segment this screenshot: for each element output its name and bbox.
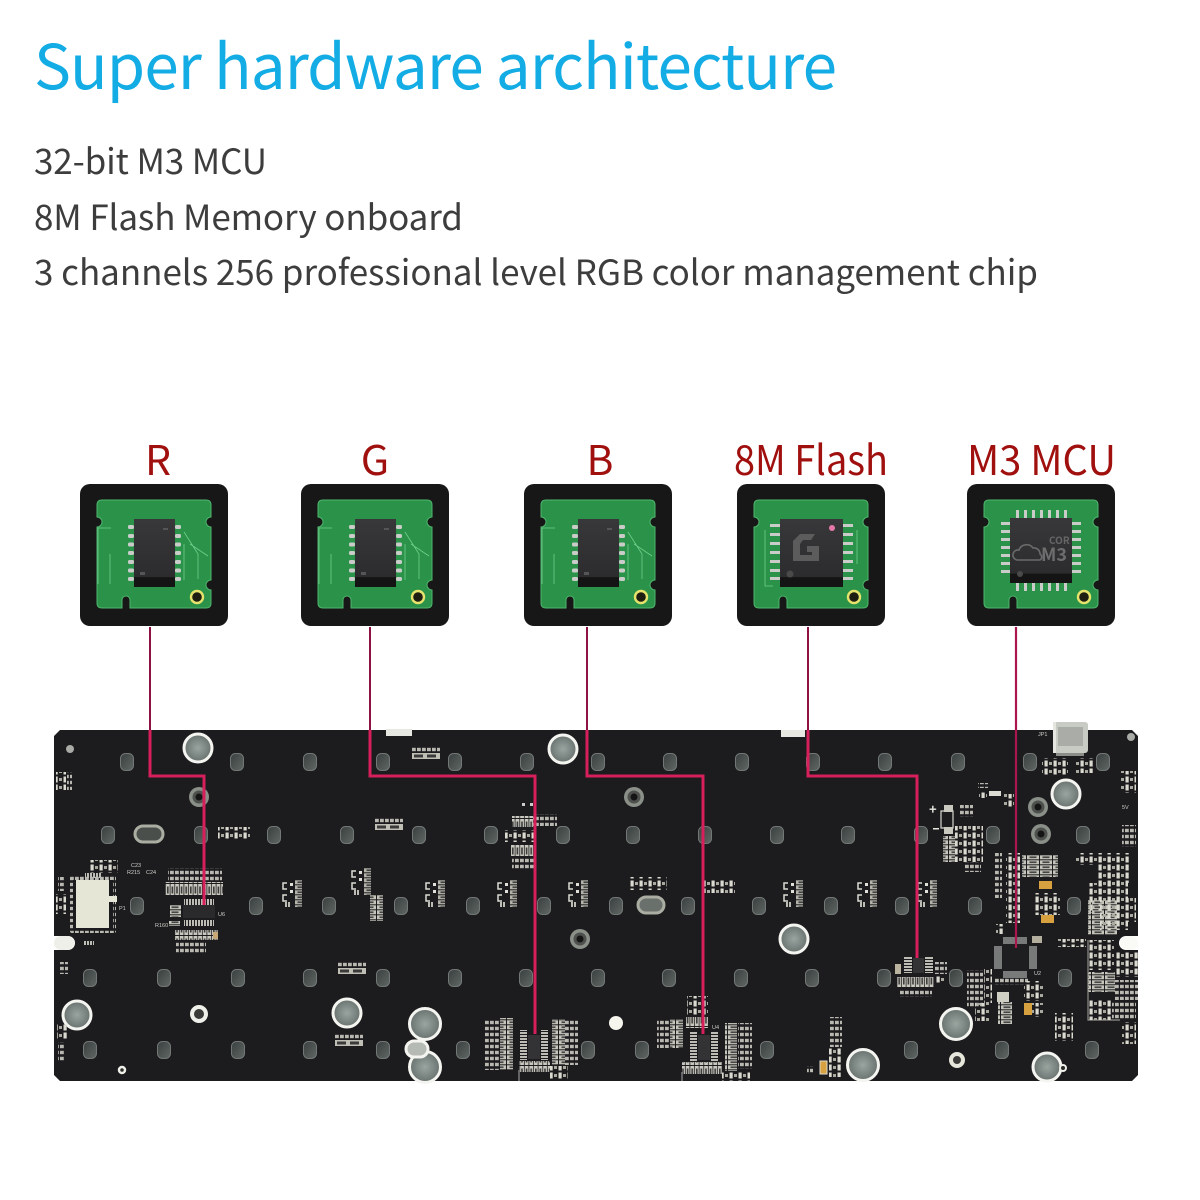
feature: flash: 8M Flash Memory onboard xyxy=(34,190,463,241)
silkscreen: U6: U6 xyxy=(218,912,225,918)
top-middle component cluster xyxy=(505,803,557,870)
icon: G logo xyxy=(793,534,819,561)
connector line: 8M Flash xyxy=(808,627,917,958)
small component clusters xyxy=(218,747,937,1046)
battery connector group xyxy=(929,783,1014,872)
slot notches xyxy=(54,729,1138,950)
connector line: R xyxy=(150,627,204,905)
chip label: R: R xyxy=(145,427,171,487)
lower right components xyxy=(807,1013,1073,1077)
silkscreen: plus: + xyxy=(929,799,937,818)
USB-C connector xyxy=(1053,722,1088,756)
power and LED driver block xyxy=(1058,853,1138,1020)
key switch holes xyxy=(84,754,1110,1058)
feature: RGB chip: 3 channels 256 professional level RGB color management chip xyxy=(34,245,1038,296)
LED footprints xyxy=(56,771,1136,1062)
MCU chip group xyxy=(967,853,1060,1024)
chip tile: G xyxy=(301,484,449,626)
chip label: G: G xyxy=(361,427,389,487)
chip label: M3 MCU: M3 MCU xyxy=(967,427,1116,487)
connector line: B xyxy=(587,627,703,1034)
U6 driver chip group xyxy=(155,868,225,954)
B channel driver chip group xyxy=(657,996,752,1081)
silkscreen: U4: U4 xyxy=(712,1025,719,1031)
silkscreen: JP1: JP1 xyxy=(1038,732,1047,738)
flash chip group xyxy=(895,957,947,997)
chip tile: R xyxy=(80,484,228,626)
icon: cloud xyxy=(1013,545,1042,560)
feature list xyxy=(34,134,1038,296)
chip label: B: B xyxy=(587,427,613,487)
keyboard PCB xyxy=(54,722,1138,1082)
wireless module xyxy=(70,860,156,945)
icon: pink dot xyxy=(829,525,835,531)
chip text: M3: M3 xyxy=(1041,541,1067,567)
USB support components xyxy=(1038,732,1093,776)
connector line: G xyxy=(370,627,535,1034)
mounting holes xyxy=(63,733,1135,1082)
silkscreen: P1: P1 xyxy=(119,906,126,912)
chip tile: M3 MCU xyxy=(967,484,1115,626)
silkscreen: C23: C23 xyxy=(131,863,141,869)
chip label: 8M Flash: 8M Flash xyxy=(734,427,888,487)
connector line: M3 MCU xyxy=(1015,627,1017,948)
silkscreen: U2: U2 xyxy=(1034,971,1041,977)
chip text: COR: COR xyxy=(1049,532,1070,547)
silkscreen: 5V: 5V xyxy=(1122,805,1129,811)
board outline xyxy=(54,730,1138,1081)
G channel driver chip group xyxy=(485,1018,578,1081)
title: Super hardware architecture xyxy=(34,17,837,107)
chip tile: B xyxy=(524,484,672,626)
feature: MCU: 32-bit M3 MCU xyxy=(34,134,267,185)
silkscreen: R215: R215 xyxy=(127,870,140,876)
silkscreen: C24: C24 xyxy=(146,870,156,876)
chip tile: 8M Flash xyxy=(737,484,885,626)
silkscreen: R160: R160 xyxy=(155,923,168,929)
